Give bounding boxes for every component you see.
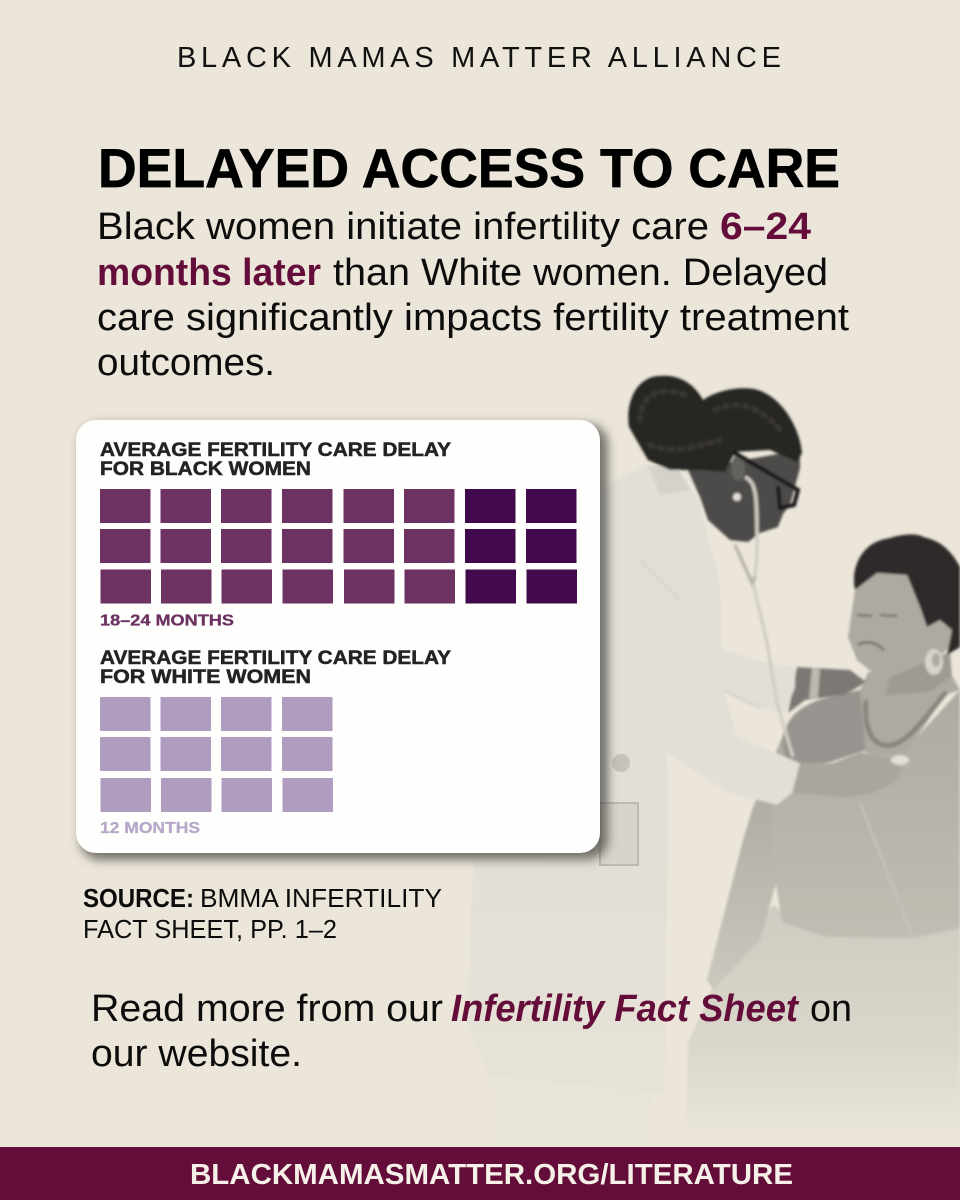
doctor hand on shoulder xyxy=(788,667,866,713)
heading: White women delay xyxy=(100,647,451,688)
waffle chart: White women, 12 squares xyxy=(100,697,333,812)
intro text block: 6–24 xyxy=(720,206,811,248)
title: DELAYED ACCESS TO CARE xyxy=(98,137,840,199)
source note: BMMA INFERTILITY xyxy=(200,883,442,913)
intro text block: care significantly impacts fertility treatment xyxy=(97,297,849,339)
call to action text: on xyxy=(810,988,852,1030)
call to action text: our website. xyxy=(91,1033,302,1075)
source note: SOURCE: xyxy=(83,883,194,913)
intro text block: outcomes. xyxy=(97,342,275,384)
doctor figure xyxy=(467,376,909,1145)
source note xyxy=(83,883,442,944)
intro text block: than White women. Delayed xyxy=(333,252,828,294)
heading: White women delay: FOR WHITE WOMEN xyxy=(100,666,311,688)
footer banner: BLACKMAMASMATTER.ORG/LITERATURE xyxy=(190,1159,793,1191)
intro text block: Black women initiate infertility care xyxy=(97,206,709,248)
footer banner xyxy=(0,1147,960,1200)
label: 12 months: 12 MONTHS xyxy=(100,820,200,837)
panel: fertility care delay chart card xyxy=(76,420,608,860)
heading: Black women delay: AVERAGE FERTILITY CARE DELAY xyxy=(100,439,451,461)
header: organisation name: BLACK MAMAS MATTER ALLIANCE xyxy=(177,42,781,74)
doctor hand with stethoscope xyxy=(792,752,903,797)
heading: Black women delay xyxy=(100,439,451,480)
photo: doctor examining patient xyxy=(467,376,960,1146)
source note: FACT SHEET, PP. 1–2 xyxy=(83,914,337,944)
heading: Black women delay: FOR BLACK WOMEN xyxy=(100,458,311,480)
call to action text: Read more from our xyxy=(91,988,443,1030)
call to action text: Infertility Fact Sheet xyxy=(451,988,799,1030)
intro text block: months later xyxy=(97,252,321,294)
label: 18–24 months: 18–24 MONTHS xyxy=(100,612,234,630)
badge on doctor coat xyxy=(600,754,638,865)
waffle chart: Black women, 24 squares xyxy=(100,489,577,604)
call to action text xyxy=(91,988,852,1075)
heading: White women delay: AVERAGE FERTILITY CARE DELAY xyxy=(100,647,451,669)
patient figure xyxy=(686,534,960,1146)
intro text block xyxy=(97,206,849,384)
